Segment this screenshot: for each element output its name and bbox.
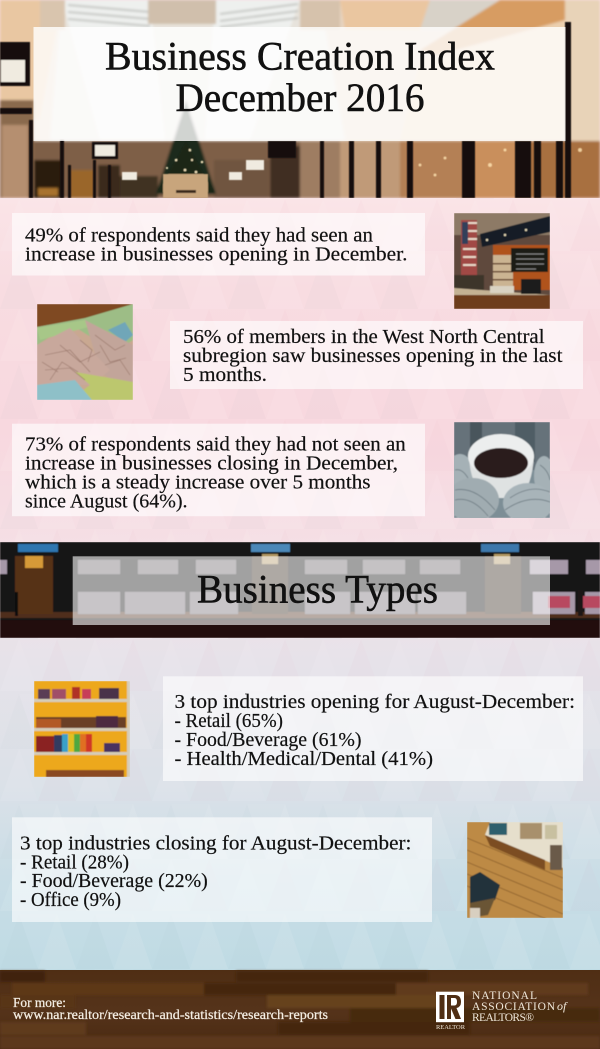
banner photo: storefront at night (0, 542, 600, 638)
logo: National Association of Realtors: of (557, 999, 568, 1013)
panel: businesses opening (12, 213, 425, 276)
panel: businesses closing: increase in businesses closing in December, (25, 452, 398, 474)
logo: National Association of Realtors: REALTORS® (472, 1012, 534, 1024)
photo: coffee shop counter (454, 213, 550, 309)
logo: National Association of Realtors: NATIONAL (472, 990, 537, 1002)
banner panel: Business Types (197, 567, 438, 612)
photo: colourful book shelves (34, 681, 130, 777)
panel: businesses closing: which is a steady increase over 5 months (25, 471, 371, 493)
panel: top industries opening: - Food/Beverage (61%) (174, 729, 362, 751)
footer text: www.nar.realtor/research-and-statistics/research-reports (13, 1008, 328, 1023)
banner panel (73, 556, 550, 625)
logo: National Association of Realtors: ASSOCIATION (472, 1001, 556, 1013)
panel: West North Central (170, 321, 583, 389)
footer text: For more: (13, 996, 66, 1011)
panel: top industries closing: 3 top industries closing for August-December: (20, 832, 411, 854)
panel: businesses opening: 49% of respondents said they had seen an (25, 225, 373, 247)
panel: top industries opening: - Retail (65%) (174, 710, 283, 732)
title: Business Creation Index (105, 34, 495, 78)
panel: businesses opening: increase in businesses opening in December. (25, 244, 408, 266)
logo: National Association of Realtors (472, 990, 568, 1024)
panel: top industries closing: - Retail (28%) (20, 851, 129, 873)
photo: folded road map (37, 304, 133, 400)
title panel (34, 27, 566, 141)
title: December 2016 (176, 75, 424, 120)
panel: top industries opening: - Health/Medical/Dental (41%) (174, 748, 433, 770)
footer (0, 970, 600, 1049)
panel: top industries closing (12, 817, 432, 922)
panel: businesses closing (12, 424, 425, 516)
banner: Business Types (0, 542, 600, 638)
logo: REALTOR block R: REALTOR (436, 1025, 465, 1031)
hero photo: shopping arcade (0, 0, 600, 198)
panel: top industries closing: - Food/Beverage (22%) (20, 870, 208, 892)
panel: top industries opening (163, 676, 583, 781)
title (105, 34, 495, 120)
logo: REALTOR block R (436, 992, 465, 1031)
photo: boutique from above (467, 822, 563, 926)
footer text (13, 996, 328, 1023)
panel: West North Central: subregion saw businesses opening in the last (183, 345, 563, 367)
panel: businesses closing: since August (64%). (25, 490, 188, 512)
wood background (0, 970, 600, 1049)
panel: top industries closing: - Office (9%) (20, 889, 121, 911)
patterned gradient background (0, 198, 600, 970)
panel: West North Central: 5 months. (183, 364, 267, 386)
panel: businesses closing: 73% of respondents said they had not seen an (25, 434, 406, 456)
panel: top industries opening: 3 top industries opening for August-December: (174, 691, 575, 713)
photo: coffee cup in mittens (454, 422, 550, 518)
panel: West North Central: 56% of members in the West North Central (183, 326, 545, 348)
